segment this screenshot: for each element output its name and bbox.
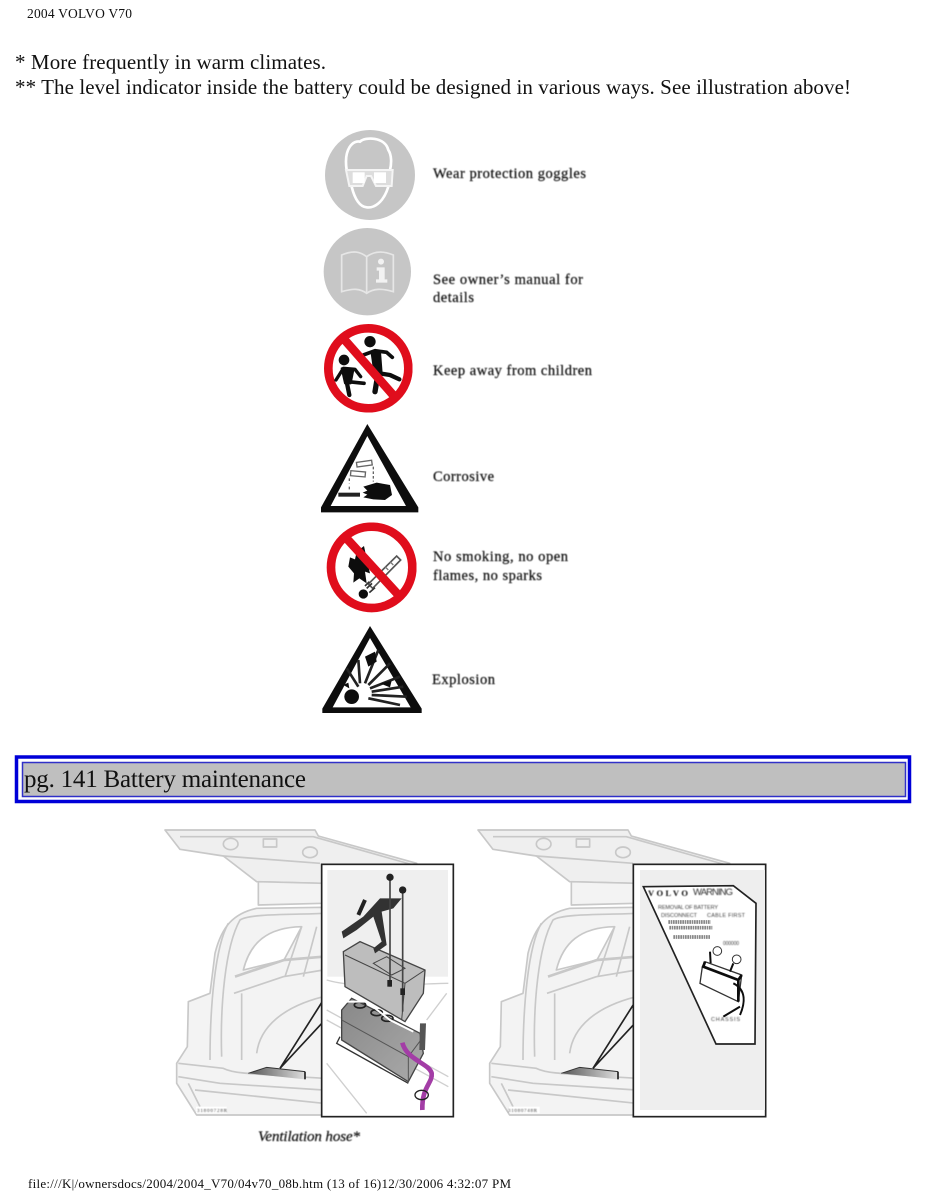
icon: owner's manual xyxy=(324,228,411,315)
hold-down bracket xyxy=(342,898,402,953)
label: owner's manual: See owner’s manual for xyxy=(433,272,583,288)
page footer: file:///K|/ownersdocs/2004/2004_V70/04v70_08b.htm (13 of 16)12/30/2006 4:32:07 PM xyxy=(28,1176,511,1191)
footnotes: * More frequently in warm climates. xyxy=(15,50,326,74)
warning label text: CABLE FIRST xyxy=(707,913,746,919)
section heading: pg. 141 Battery maintenance xyxy=(24,766,306,793)
image codes xyxy=(197,1109,538,1114)
warning label text: CHASSIS xyxy=(711,1017,740,1023)
battery xyxy=(342,998,423,1082)
inset: battery detail xyxy=(322,864,453,1117)
car cargo area xyxy=(478,830,730,1115)
label: goggles: Wear protection goggles xyxy=(433,166,586,182)
battery cover xyxy=(343,942,425,1022)
icon: keep away from children xyxy=(328,328,408,408)
icon: no smoking, no open flames xyxy=(331,527,412,608)
car cargo area xyxy=(165,830,417,1115)
battery diagram xyxy=(700,962,742,1002)
warning label text: 000000 xyxy=(723,941,739,947)
label: no smoking: flames, no sparks xyxy=(433,568,542,584)
label: owner's manual: details xyxy=(433,290,474,306)
warning label text: REMOVAL OF BATTERY xyxy=(658,905,718,911)
icon: corrosive xyxy=(321,424,418,512)
page header: 2004 VOLVO V70 xyxy=(27,6,132,21)
warning label text: DISCONNECT xyxy=(661,913,698,919)
illustration: battery location and ventilation hose xyxy=(165,830,453,1145)
footnotes xyxy=(15,50,851,99)
ventilation hose xyxy=(402,1043,432,1110)
label: no smoking xyxy=(433,549,569,584)
label: explosion: Explosion xyxy=(432,672,496,688)
caption: ventilation hose: Ventilation hose* xyxy=(258,1129,360,1145)
icon: explosion xyxy=(322,626,422,713)
label: corrosive: Corrosive xyxy=(433,469,494,485)
inset: warning label xyxy=(633,864,766,1117)
image codes: 31800728R xyxy=(197,1109,228,1114)
warning label text xyxy=(648,887,746,1023)
image codes: 31080748R xyxy=(508,1109,538,1114)
illustration: battery warning label xyxy=(478,830,766,1117)
warning label text: WARNING xyxy=(693,887,733,898)
label: children: Keep away from children xyxy=(433,363,593,379)
label: no smoking: No smoking, no open xyxy=(433,549,569,565)
section heading xyxy=(16,757,910,802)
icon: protection goggles xyxy=(325,130,415,220)
label: owner's manual xyxy=(433,272,583,306)
warning label text: VOLVO xyxy=(648,888,688,898)
footnotes: ** The level indicator inside the battery could be designed in various ways. See illustration above! xyxy=(15,75,851,99)
safety symbols panel xyxy=(321,130,593,713)
